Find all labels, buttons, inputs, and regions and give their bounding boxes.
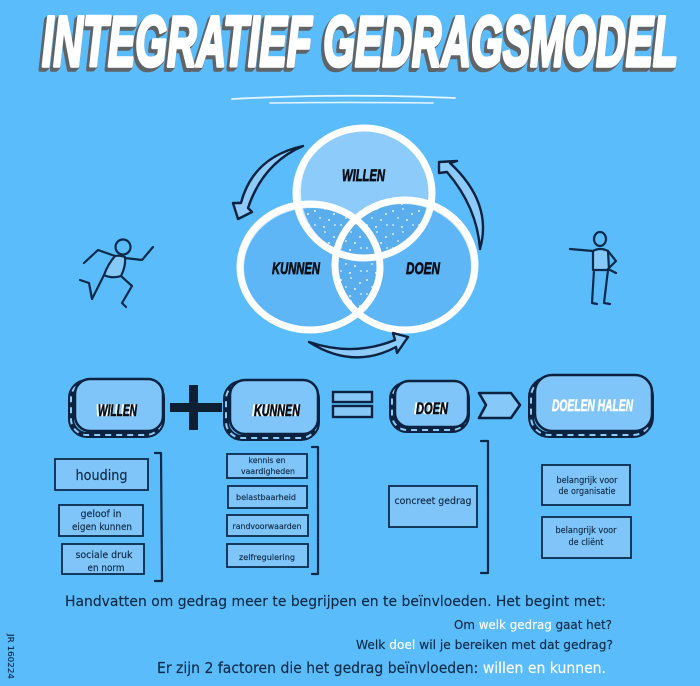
box: kennis en vaardigheden: vaardigheden (241, 467, 295, 476)
box: belangrijk voor de client (542, 517, 631, 558)
pill: kunnen: KUNNEN (254, 401, 300, 420)
box: geloof in eigen kunnen (59, 505, 143, 536)
circle: doen (335, 200, 475, 330)
box: houding: houding (76, 468, 128, 484)
pill: doelen halen (531, 375, 652, 435)
circle: willen (296, 128, 432, 258)
venn outlines (240, 126, 475, 330)
box: geloof in eigen kunnen: geloof in (80, 509, 122, 520)
label: willen: WILLEN (342, 166, 385, 185)
box: sociale druk en norm: sociale druk (76, 550, 133, 561)
title underline (232, 96, 455, 103)
chevron arrow (479, 393, 520, 418)
overlap: willen and kunnen (302, 208, 350, 248)
overlap: kunnen and doen (338, 258, 376, 308)
equals sign (333, 392, 372, 417)
text: conclusion: Er zijn 2 factoren die het gedrag beïnvloeden: willen en kunnen. (157, 659, 606, 677)
box: belangrijk voor de organisatie: de organisatie (558, 487, 616, 497)
text: question 2: Welk doel wil je bereiken met dat gedrag? (356, 638, 613, 652)
pill: willen (71, 379, 163, 435)
pill: willen: WILLEN (98, 401, 137, 420)
label: doen: DOEN (406, 259, 440, 278)
venn diagram (240, 126, 475, 330)
box: randvoorwaarden: randvoorwaarden (232, 522, 302, 531)
box: zelfregulering: zelfregulering (239, 553, 295, 562)
pill: doen: DOEN (416, 399, 448, 418)
panel: willen factors (55, 453, 162, 581)
bracket (481, 441, 488, 573)
panel: doen factors (389, 441, 488, 573)
plus sign (170, 385, 222, 430)
box: sociale druk en norm: en norm (88, 563, 124, 574)
icon: running figure (80, 240, 153, 307)
pill: kunnen (226, 380, 318, 438)
box: kennis en vaardigheden (227, 454, 307, 478)
text: document code: JR 160224 (6, 633, 15, 679)
box: belastbaarheid: belastbaarheid (236, 493, 296, 502)
arrow: bottom (309, 333, 408, 357)
box: geloof in eigen kunnen: eigen kunnen (72, 522, 132, 533)
bracket (155, 453, 162, 581)
panel: kunnen factors (227, 447, 318, 574)
arrow: top left (233, 146, 303, 219)
pill: doen (392, 381, 468, 430)
box: concreet gedrag: concreet gedrag (394, 496, 472, 507)
bracket (312, 447, 318, 574)
box: belangrijk voor de client: belangrijk voor (556, 526, 617, 536)
arrow: right (439, 161, 483, 249)
text: intro sentence: Handvatten om gedrag meer te begrijpen en te beïnvloeden. Het begint met: (65, 594, 606, 610)
overlap: willen and doen (361, 204, 426, 252)
box: sociale druk en norm (62, 544, 144, 574)
label: kunnen: KUNNEN (272, 259, 320, 278)
box: kennis en vaardigheden: kennis en (248, 456, 286, 465)
circle: kunnen (240, 204, 380, 330)
box: belangrijk voor de organisatie (542, 465, 630, 505)
icon: pointing figure (570, 232, 616, 304)
pill: doelen halen: DOELEN HALEN (552, 396, 633, 415)
text: question 1: Om welk gedrag gaat het? (454, 618, 612, 632)
panel: doelen halen factors (542, 465, 631, 558)
box: belangrijk voor de organisatie: belangrijk voor (556, 476, 618, 486)
box: belangrijk voor de client: de cliënt (568, 538, 604, 548)
